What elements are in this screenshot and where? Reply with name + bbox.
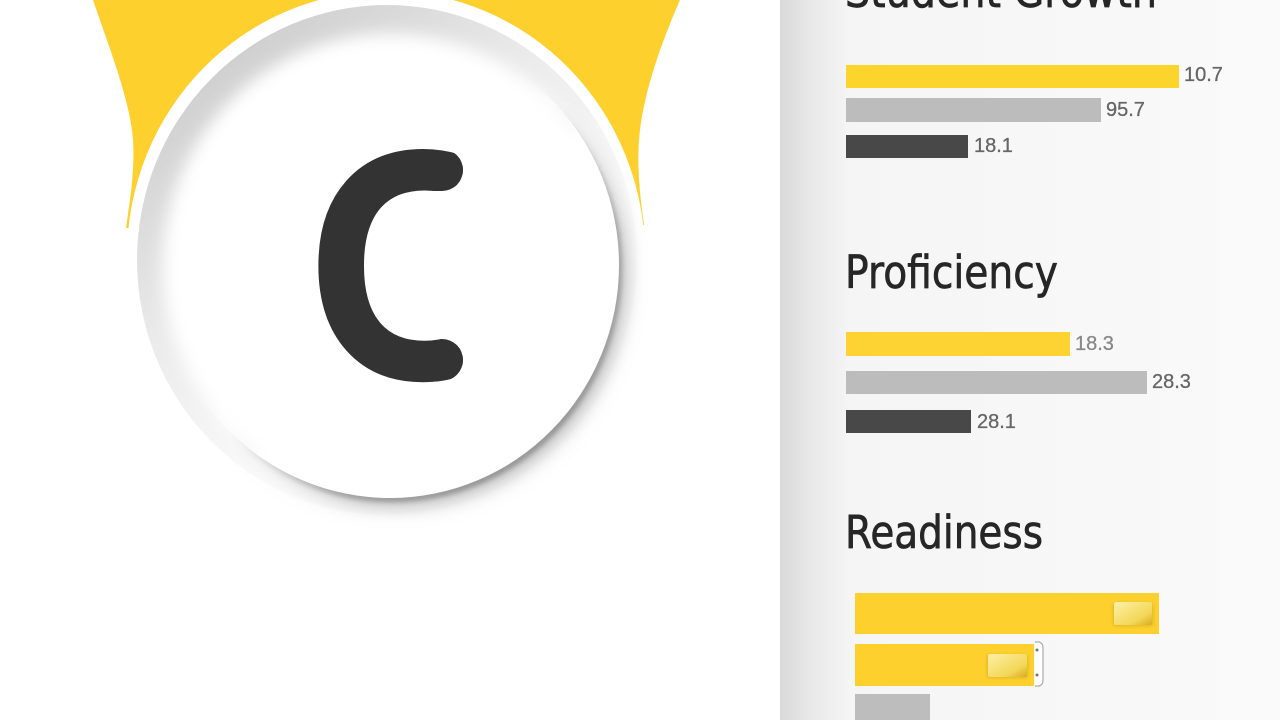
chip shadow: long bar bbox=[1113, 603, 1153, 626]
bar: dark bbox=[846, 410, 971, 433]
badge face soft edge bbox=[163, 34, 617, 496]
bar: yellow bbox=[846, 65, 1179, 88]
bar chart: proficiency bbox=[846, 332, 1191, 433]
bar: dark bbox=[846, 135, 968, 158]
badge outer ring bbox=[127, 0, 645, 521]
badge hard shadow bbox=[163, 35, 621, 501]
badge soft shadow bbox=[167, 39, 625, 505]
bracket: short bar end bbox=[1035, 642, 1043, 686]
bar: gray bbox=[855, 694, 930, 720]
panel: metrics bbox=[780, 0, 1280, 720]
value: gray bar: 28.3 bbox=[1152, 371, 1191, 393]
grade badge bbox=[127, 0, 645, 521]
value: dark bar: 18.1 bbox=[974, 135, 1013, 157]
value: yellow bar: 10.7 bbox=[1184, 64, 1223, 86]
value: dark bar: 28.1 bbox=[977, 411, 1016, 433]
chip shadow: short bar bbox=[987, 655, 1028, 678]
chip: long bar bbox=[1114, 602, 1152, 625]
grade letter: C bbox=[312, 107, 500, 437]
chip: short bar bbox=[988, 654, 1027, 677]
bar: gray bbox=[846, 371, 1147, 394]
bar chart: readiness bbox=[855, 593, 1159, 720]
heading: readiness: Readiness bbox=[845, 506, 1043, 559]
value: yellow bar: 18.3 bbox=[1075, 333, 1114, 355]
yellow burst behind badge bbox=[93, 0, 680, 228]
bar: gray bbox=[846, 98, 1101, 122]
badge face crisp edge bbox=[161, 32, 619, 498]
badge recessed band bbox=[137, 5, 637, 515]
bar: yellow short bbox=[855, 644, 1034, 686]
heading: proficiency: Proficiency bbox=[845, 246, 1058, 299]
bar: yellow bbox=[846, 332, 1070, 356]
value: gray bar: 95.7 bbox=[1106, 99, 1145, 121]
bar: yellow long bbox=[855, 593, 1159, 634]
bar chart: student growth bbox=[846, 64, 1223, 158]
